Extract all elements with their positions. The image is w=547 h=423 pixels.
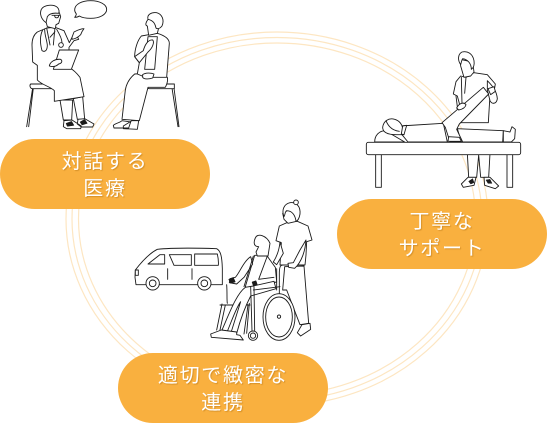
therapist legs and shoes [461,153,499,189]
therapist torso [453,52,497,123]
label: careful support: 丁寧な [409,211,475,233]
wheelchair and seated person [211,235,295,340]
patient [113,13,179,129]
illustration: van and caregiver with wheelchair [135,200,312,340]
label: careful support [337,199,547,269]
illustration: therapist stretching patient on treatment bed [366,52,521,189]
patient lying with raised leg [375,87,515,142]
treatment bed [366,142,521,187]
label: dialogue medicine: 医療 [83,178,127,200]
caregiver [273,200,312,336]
label: careful support: サポート [399,238,485,260]
label: precise coordination [118,353,328,423]
decorative concentric rings [66,32,488,406]
doctor [27,5,94,129]
label: dialogue medicine: 対話する [62,151,148,173]
label: precise coordination: 連携 [201,392,245,414]
icon: speech bubble [75,1,107,18]
label: precise coordination: 適切で緻密な [158,365,288,387]
icon: van [135,248,222,290]
label: dialogue medicine [0,139,210,209]
illustration: doctor and patient talking [27,1,179,129]
